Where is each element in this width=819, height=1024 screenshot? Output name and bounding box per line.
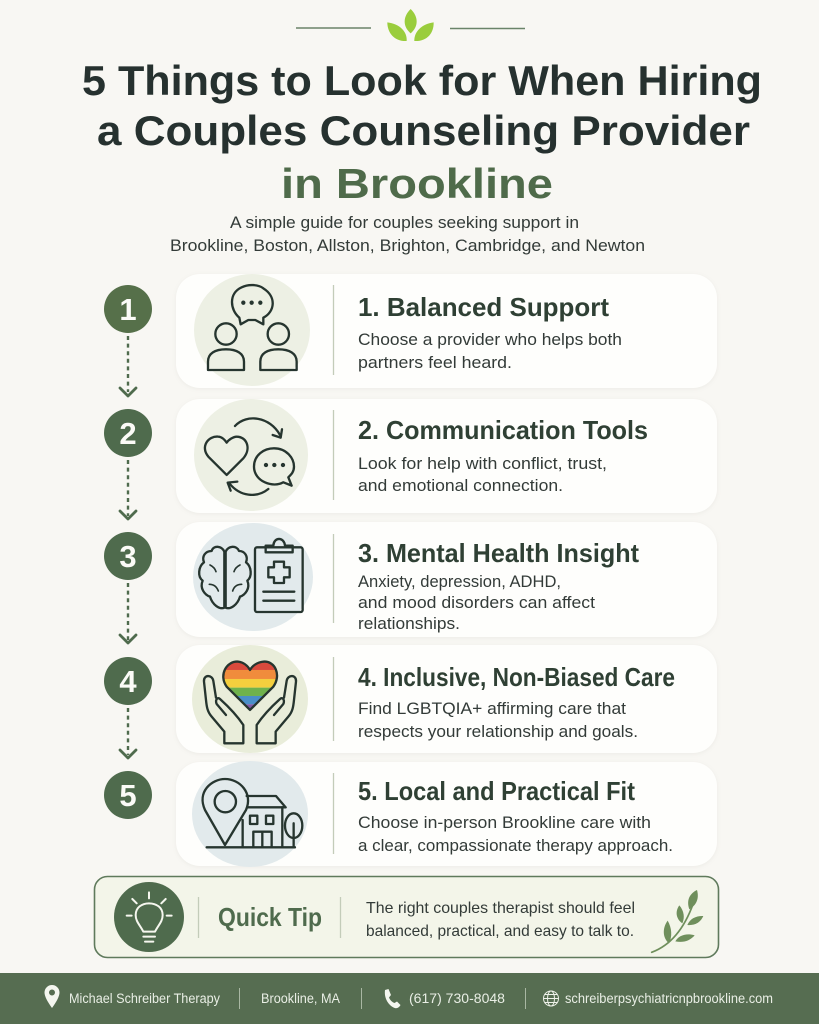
text: practice name: Michael Schreiber Therapy	[69, 991, 220, 1006]
text: local fit: Choose in-person Brookline care with	[358, 814, 651, 832]
text: quick tip	[366, 900, 635, 940]
panel: communication tools	[176, 399, 717, 513]
icon: brain and clipboard	[193, 523, 313, 631]
text: phone number: (617) 730-8048	[409, 991, 505, 1006]
text: quick tip: The right couples therapist should feel	[366, 900, 635, 917]
heading: communication tools: 2. Communication Tools	[358, 415, 648, 445]
step marker 3: 3	[119, 539, 137, 574]
text: inclusive care	[358, 700, 638, 741]
arrow: step 1 to 2	[120, 336, 136, 396]
panel: mental health insight	[176, 522, 717, 637]
heading: local fit: 5. Local and Practical Fit	[358, 776, 635, 806]
title: 5 Things to Look for When Hiring	[82, 57, 762, 104]
text: quick tip: balanced, practical, and easy to talk to.	[366, 923, 634, 940]
subtitle: A simple guide for couples seeking support in	[230, 213, 579, 232]
arrow: step 3 to 4	[120, 583, 136, 643]
step marker 3	[104, 532, 152, 580]
text: communication tools: Look for help with conflict, trust,	[358, 455, 607, 473]
footer bar	[0, 973, 819, 1024]
subtitle: Brookline, Boston, Allston, Brighton, Cambridge, and Newton	[170, 236, 645, 255]
step marker 2: 2	[119, 416, 137, 451]
title	[82, 57, 762, 207]
arrow: step 4 to 5	[120, 708, 136, 758]
arrow: step 2 to 3	[120, 460, 136, 519]
step marker 2	[104, 409, 152, 457]
icon: globe	[544, 991, 558, 1006]
step marker 4: 4	[119, 664, 137, 699]
title: in Brookline	[281, 160, 553, 207]
step marker 1: 1	[119, 292, 137, 327]
step marker 5	[104, 771, 152, 819]
panel: quick tip	[94, 876, 718, 958]
step marker 1	[104, 285, 152, 333]
heading: inclusive care: 4. Inclusive, Non-Biased Care	[358, 662, 675, 692]
text: local fit	[358, 814, 673, 855]
text: location: Brookline, MA	[261, 991, 340, 1006]
icon: two people and speech bubble	[194, 274, 310, 386]
text: communication tools: and emotional connection.	[358, 477, 563, 495]
icon: rainbow heart in hands	[192, 645, 308, 753]
icon: phone	[385, 989, 400, 1008]
text: mental health insight: relationships.	[358, 615, 460, 633]
text: local fit: a clear, compassionate therapy approach.	[358, 837, 673, 855]
title: a Couples Counseling Provider	[97, 107, 750, 154]
text: mental health insight	[358, 573, 595, 633]
icon: location pin	[44, 985, 60, 1008]
icon: leaf sprig	[652, 890, 703, 952]
step marker 4	[104, 657, 152, 705]
text: balanced support	[358, 331, 622, 372]
text: inclusive care: respects your relationship and goals.	[358, 723, 638, 741]
heading: balanced support: 1. Balanced Support	[358, 292, 609, 322]
text: website: schreiberpsychiatricnpbrookline.com	[565, 991, 773, 1006]
icon: heart, speech bubble and cycle arrows	[194, 399, 308, 511]
panel: balanced support	[176, 274, 717, 388]
text: balanced support: partners feel heard.	[358, 354, 512, 372]
icon: top leaf ornament	[296, 9, 525, 41]
panel: local fit	[176, 761, 717, 867]
panel: inclusive care	[176, 645, 717, 753]
text: inclusive care: Find LGBTQIA+ affirming care that	[358, 700, 626, 718]
subtitle	[170, 213, 645, 255]
icon: light bulb	[114, 882, 184, 952]
text: mental health insight: and mood disorders can affect	[358, 594, 595, 612]
heading: quick tip: Quick Tip	[218, 902, 322, 932]
icon: map pin and house	[192, 761, 308, 867]
text: balanced support: Choose a provider who helps both	[358, 331, 622, 349]
text: communication tools	[358, 455, 607, 495]
text: mental health insight: Anxiety, depression, ADHD,	[358, 573, 561, 591]
heading: mental health insight: 3. Mental Health Insight	[358, 538, 639, 568]
step marker 5: 5	[119, 778, 137, 813]
